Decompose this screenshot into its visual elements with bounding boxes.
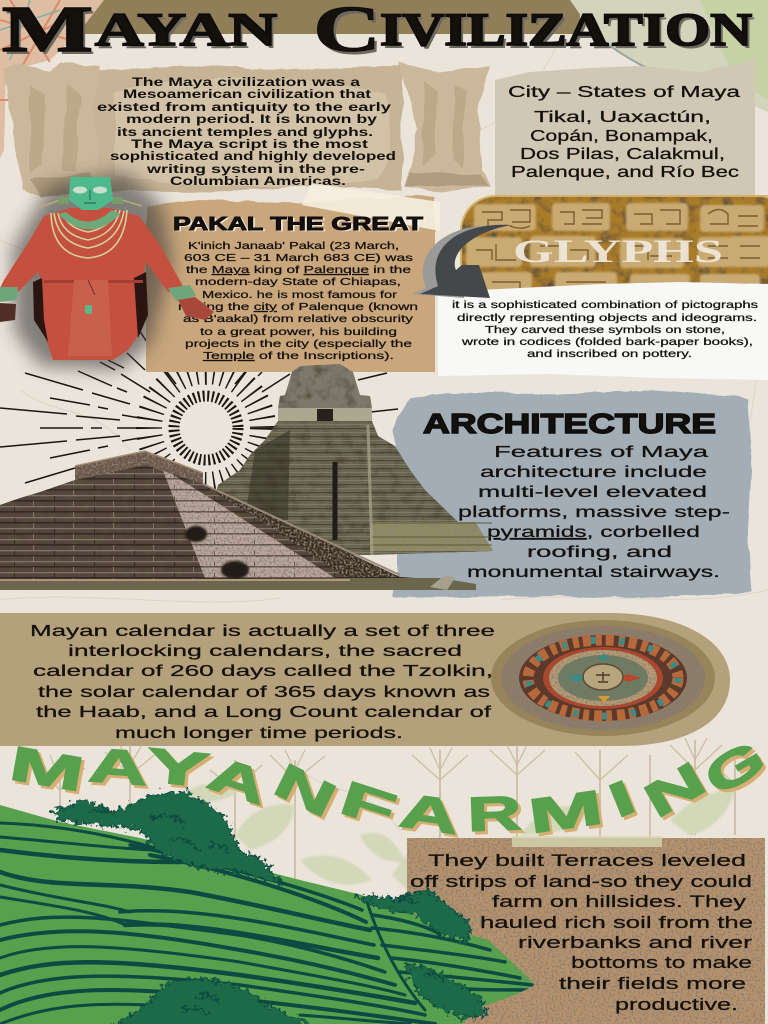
trees	[52, 792, 488, 1024]
heading: Mayan Farming: M	[9, 739, 91, 805]
farming text: farm on hillsides. They	[492, 893, 747, 911]
heading: Mayan Farming: N	[635, 752, 715, 828]
heading: Mayan Farming: M	[6, 736, 88, 802]
calendar text	[30, 623, 495, 742]
heading: Mayan Farming: M	[528, 783, 609, 847]
corn field background	[35, 738, 762, 890]
heading: Mayan Farming: A	[205, 749, 277, 818]
illustration: terraced hillside	[0, 792, 535, 1024]
scroll text: sophisticated and highly developed	[110, 151, 396, 163]
heading: Mayan Farming: A	[202, 746, 274, 815]
calendar text: interlocking calendars, the sacred	[68, 643, 462, 660]
city list: Dos Pilas, Calakmul,	[520, 146, 725, 163]
heading: Mayan Farming: A	[396, 783, 462, 845]
title: AYAN	[95, 4, 277, 56]
scroll text: Mesoamerican civilization that	[123, 89, 371, 101]
panel: introduction scroll	[3, 62, 492, 198]
architecture text: architecture include	[480, 464, 707, 481]
farming text: riverbanks and river	[518, 934, 753, 952]
Pakal biography: K'inich Janaab' Pakal (23 March,	[188, 240, 399, 252]
farming text: productive.	[615, 996, 738, 1014]
panel: glyphs explanation: wrote in codices (folded bark-paper books),	[461, 336, 753, 348]
scroll text: Columbian Americas.	[170, 176, 346, 188]
top kraft paper strip	[70, 0, 580, 34]
tape	[302, 183, 440, 231]
scroll text: The Maya civilization was a	[132, 77, 361, 89]
heading: Mayan Farming: I	[604, 773, 646, 831]
farming text: off strips of land-so they could	[410, 873, 752, 891]
heading: Mayan Farming: Y	[144, 738, 212, 798]
heading: Mayan Farming: F	[337, 774, 405, 842]
Pakal biography: 603 CE – 31 March 683 CE) was	[184, 252, 413, 264]
panel: glyphs explanation: it is a sophisticated combination of pictographs	[452, 299, 758, 311]
title	[2, 0, 755, 69]
heading: Mayan Farming: A	[87, 738, 149, 796]
panel: city-states	[495, 60, 755, 210]
city-states heading: City – States of Maya	[508, 84, 741, 101]
heading: Mayan Farming: M	[525, 780, 606, 844]
Pakal biography	[178, 240, 418, 362]
sunburst	[0, 327, 398, 485]
pyramid	[0, 451, 476, 590]
heading: Mayan Farming: N	[638, 755, 718, 831]
Pakal heading: PAKAL THE GREAT	[173, 213, 424, 234]
heading: Mayan Farming: N	[266, 753, 344, 828]
heading: Mayan Farming: R	[470, 789, 525, 845]
Pakal heading: PAKAL THE GREAT	[175, 214, 426, 235]
calendar text: much longer time periods.	[115, 725, 403, 742]
architecture text: pyramids , corbelled	[487, 524, 700, 541]
calendar text: calendar of 260 days called the Tzolkin,	[33, 663, 493, 680]
scroll text: existed from antiquity to the early	[97, 102, 392, 114]
heading: Mayan Farming: R	[467, 786, 522, 842]
farming text: They built Terraces leveled	[428, 852, 746, 870]
arrow	[412, 225, 512, 298]
figure: Pakal statue	[0, 172, 214, 370]
heading: Mayan Farming: I	[601, 770, 643, 828]
panel: glyphs explanation: and inscribed on pottery.	[527, 348, 692, 360]
heading: Mayan Farming: N	[269, 756, 347, 831]
Pakal biography: the Maya king of Palenque in the	[186, 264, 411, 276]
scroll text: its ancient temples and glyphs.	[117, 127, 373, 139]
panel: glyphs explanation	[438, 282, 768, 380]
architecture text: roofing, and	[527, 544, 672, 561]
map scrap: top left	[0, 0, 104, 158]
architecture text: Features of Maya	[494, 444, 708, 461]
title: AYAN	[98, 7, 280, 59]
calendar text: the solar calendar of 365 days known as	[38, 684, 490, 701]
heading: Mayan Farming	[6, 729, 768, 848]
calendar text: the Haab, and a Long Count calendar of	[36, 704, 492, 721]
panel: glyphs image	[460, 195, 768, 290]
scroll text	[97, 77, 396, 188]
panel: calendar band	[0, 613, 730, 746]
panel: farming note	[407, 836, 765, 1024]
city list: Palenque, and Río Bec	[511, 164, 739, 181]
tape	[512, 836, 662, 847]
Pakal biography: Temple of the Inscriptions).	[203, 350, 394, 362]
scroll text: The Maya script is the most	[131, 139, 368, 151]
panel: glyphs explanation: They carved these symbols on stone,	[485, 324, 725, 336]
glyphs heading: GLYPHS	[513, 234, 723, 270]
architecture text	[458, 444, 730, 581]
architecture text: multi-level elevated	[478, 484, 707, 501]
panel: architecture	[392, 390, 752, 598]
heading: Mayan Farming: Y	[147, 741, 215, 801]
temple	[200, 364, 493, 555]
panel: Pakal the Great	[146, 183, 440, 372]
Pakal biography: modern-day State of Chiapas,	[195, 276, 401, 288]
calendar text: Mayan calendar is actually a set of three	[30, 623, 495, 640]
panel: glyphs explanation: directly representing objects and ideograms.	[457, 312, 757, 324]
Pakal biography: projects in the city (especially the	[185, 338, 412, 350]
heading: Mayan Farming: A	[399, 786, 465, 848]
scroll text: writing system in the pre-	[145, 164, 365, 176]
farming text: their fields more	[559, 975, 746, 993]
heading: Mayan Farming: A	[90, 741, 152, 799]
title: IVILIZATION	[380, 4, 752, 56]
architecture heading: ARCHITECTURE	[423, 408, 716, 439]
architecture text: monumental stairways.	[467, 564, 720, 581]
Pakal heading	[173, 213, 426, 235]
city list: Copán, Bonampak,	[530, 128, 713, 145]
farming text	[410, 852, 753, 1014]
heading: Mayan Farming: F	[334, 771, 402, 839]
icon: calendar stone	[491, 620, 715, 736]
title: IVILIZATION	[383, 7, 755, 59]
farming text: bottoms to make	[571, 954, 752, 972]
map scrap: top right	[570, 0, 768, 112]
city list: Tikal, Uaxactún,	[534, 109, 711, 126]
scroll text: modern period. It is known by	[126, 114, 378, 126]
Pakal biography: Mexico. he is most famous for	[202, 289, 398, 301]
Pakal biography: as B'aakal) from relative obscurity	[183, 313, 414, 325]
architecture text: platforms, massive step-	[458, 504, 730, 521]
glyph carvings	[462, 197, 768, 290]
farming text: hauled rich soil from the	[480, 914, 753, 932]
Pakal biography: raising the city of Palenque (known	[178, 301, 418, 313]
stone base ledge	[0, 578, 476, 590]
Pakal biography: to a great power, his building	[200, 326, 397, 338]
city list	[511, 109, 739, 181]
